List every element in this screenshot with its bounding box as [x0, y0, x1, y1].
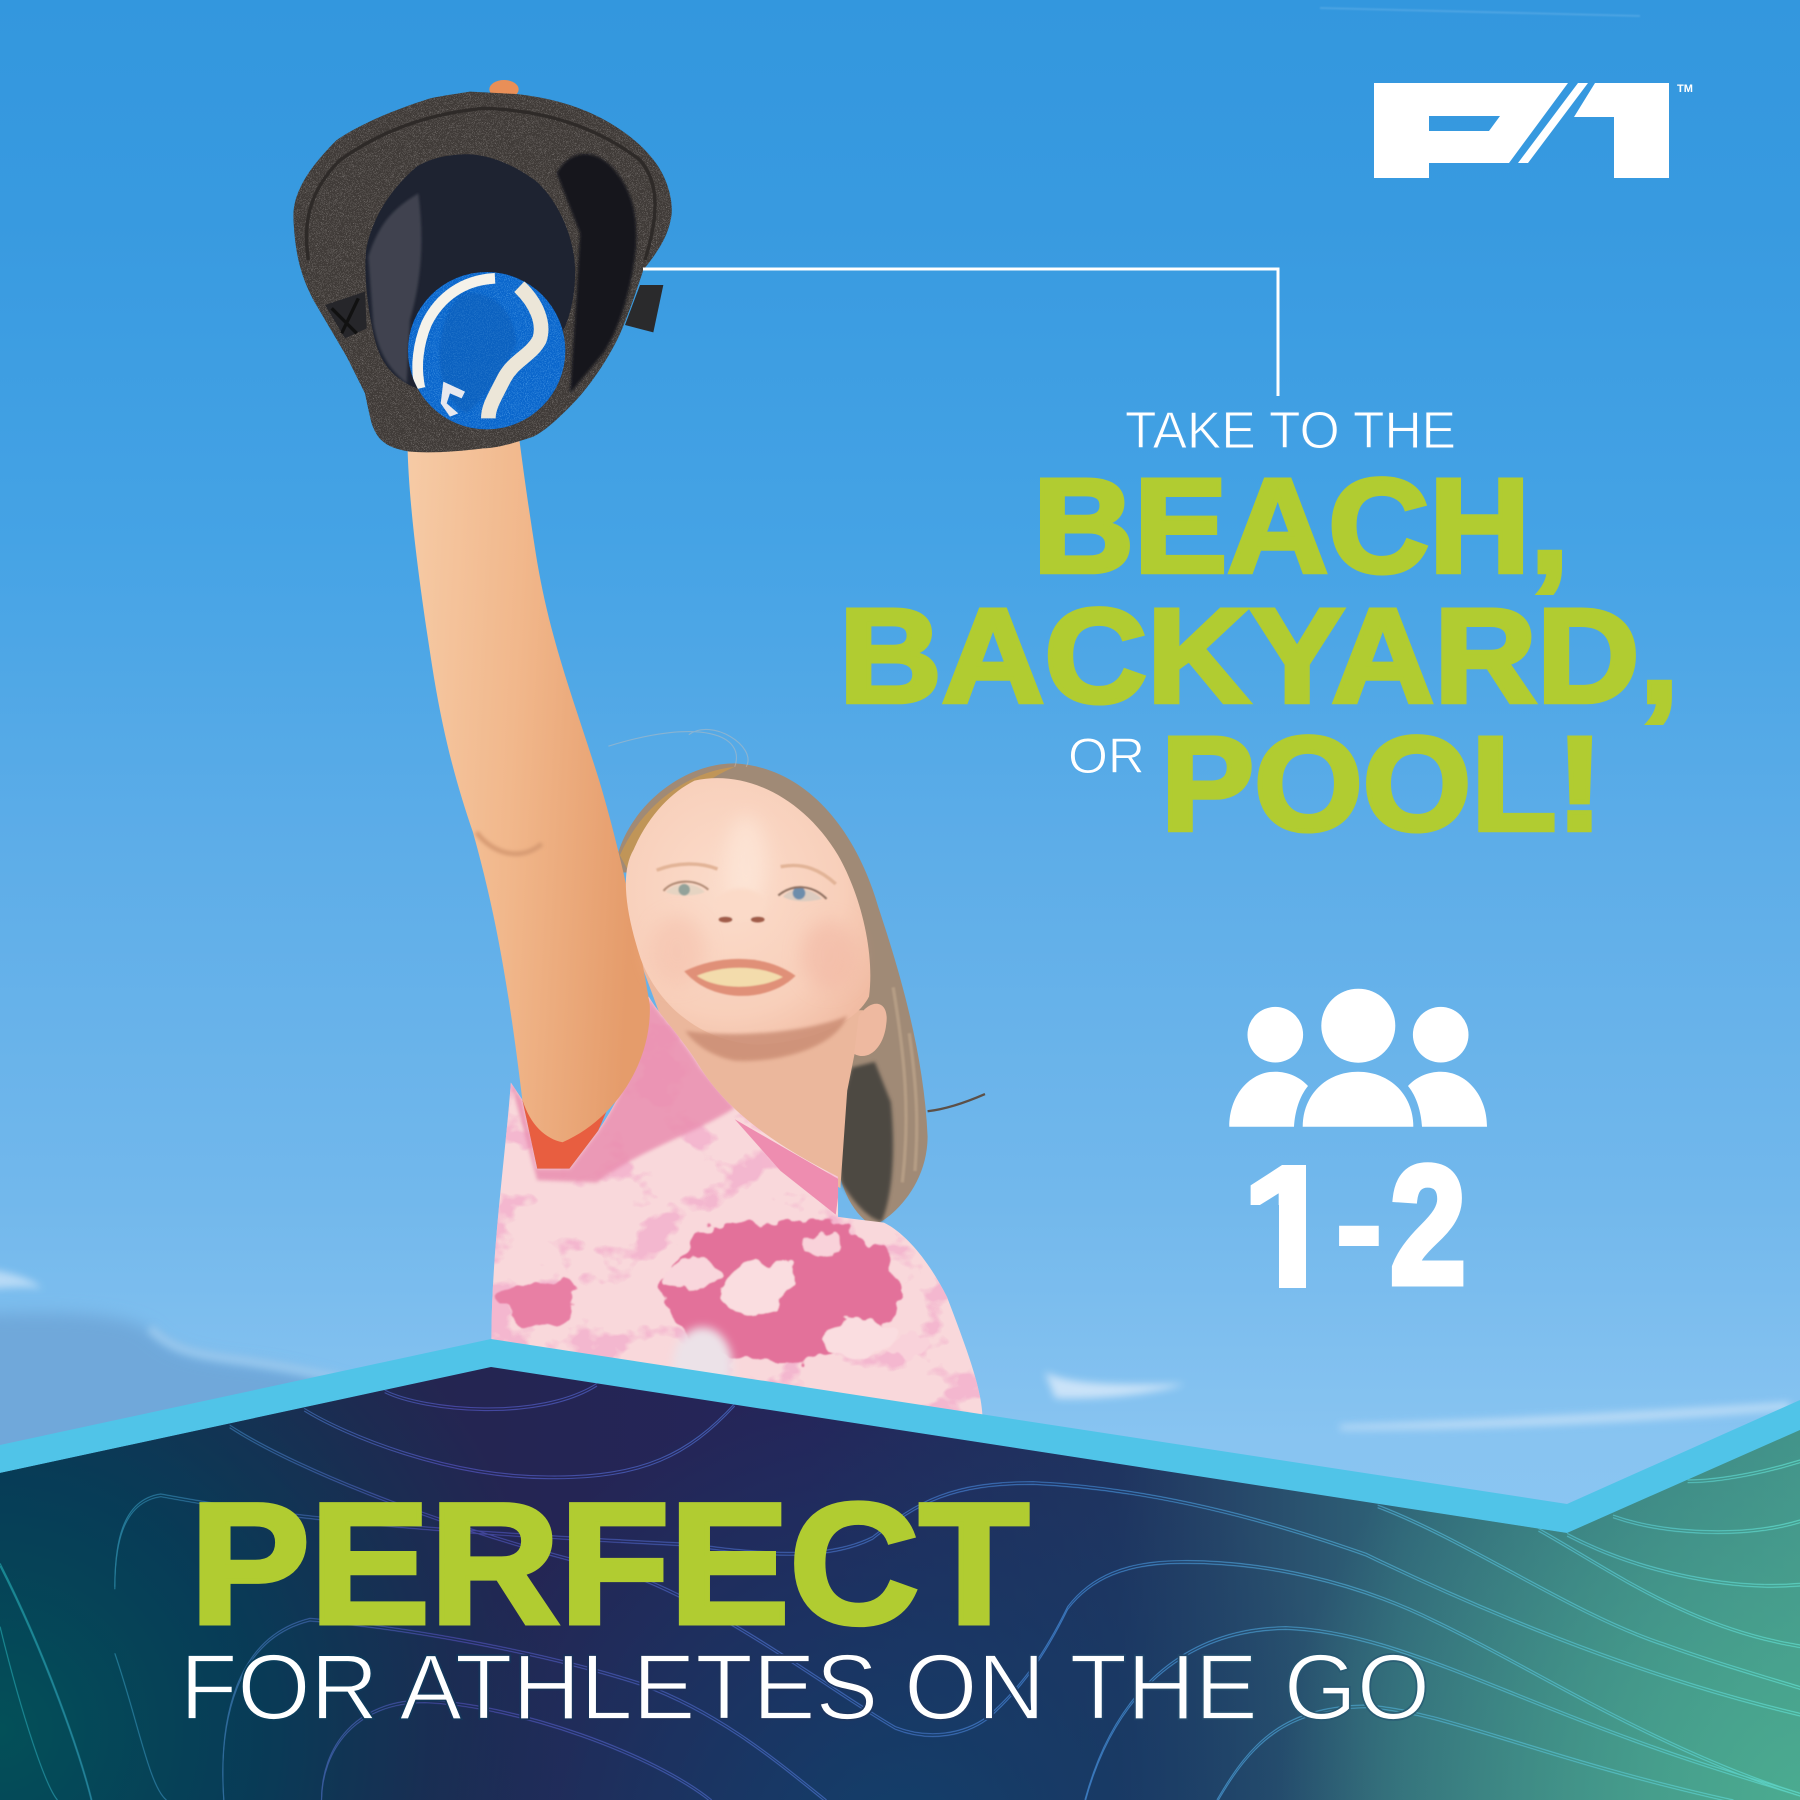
- P1 logo: TM: [1677, 83, 1693, 95]
- photo: girl raising glove and ball: [290, 80, 999, 1435]
- nose: [715, 889, 766, 923]
- hair: [608, 729, 985, 1226]
- armhole: [522, 1068, 626, 1169]
- smile: [684, 959, 796, 996]
- player count: 1: [1242, 1132, 1337, 1322]
- players icon: three people: [1229, 989, 1487, 1127]
- shadow on glove: [557, 154, 636, 393]
- heading: PERFECT: PERFECT: [190, 1468, 1029, 1660]
- headline: take to the beach, backyard, or pool: POOL!: [1161, 710, 1603, 859]
- X stitching: [325, 292, 367, 338]
- bottom band: cyan edge: [0, 1339, 1800, 1800]
- callout line from glove to headline: [643, 269, 1278, 396]
- tennis ball: [408, 272, 565, 429]
- glove with ball: [290, 80, 677, 457]
- headline: take to the beach, backyard, or pool: TAKE TO THE: [1125, 402, 1456, 460]
- tie-dye veins: [501, 1220, 925, 1363]
- headline: take to the beach, backyard, or pool: BEACH,: [1033, 452, 1569, 601]
- eyes: [657, 864, 836, 901]
- shirt: [491, 996, 982, 1414]
- neck: [637, 953, 863, 1188]
- raised arm: [408, 436, 650, 1142]
- subheading: FOR ATHLETES ON THE GO: [180, 1635, 1430, 1739]
- bottom band: dark gradient with contour lines: [0, 1330, 1800, 1800]
- glove strap: [625, 285, 663, 332]
- headline: take to the beach, backyard, or pool: [839, 402, 1679, 859]
- palm patch: [365, 154, 575, 407]
- player count: -: [1333, 1127, 1385, 1317]
- headline: take to the beach, backyard, or pool: OR: [1068, 728, 1145, 784]
- glove body: [293, 92, 672, 452]
- P1 logo: [1374, 83, 1693, 178]
- player count: 2: [1390, 1131, 1466, 1319]
- player count: [1250, 1162, 1464, 1288]
- headline: take to the beach, backyard, or pool: BACKYARD,: [839, 582, 1679, 731]
- ear: [854, 1004, 887, 1056]
- face: [626, 778, 887, 1061]
